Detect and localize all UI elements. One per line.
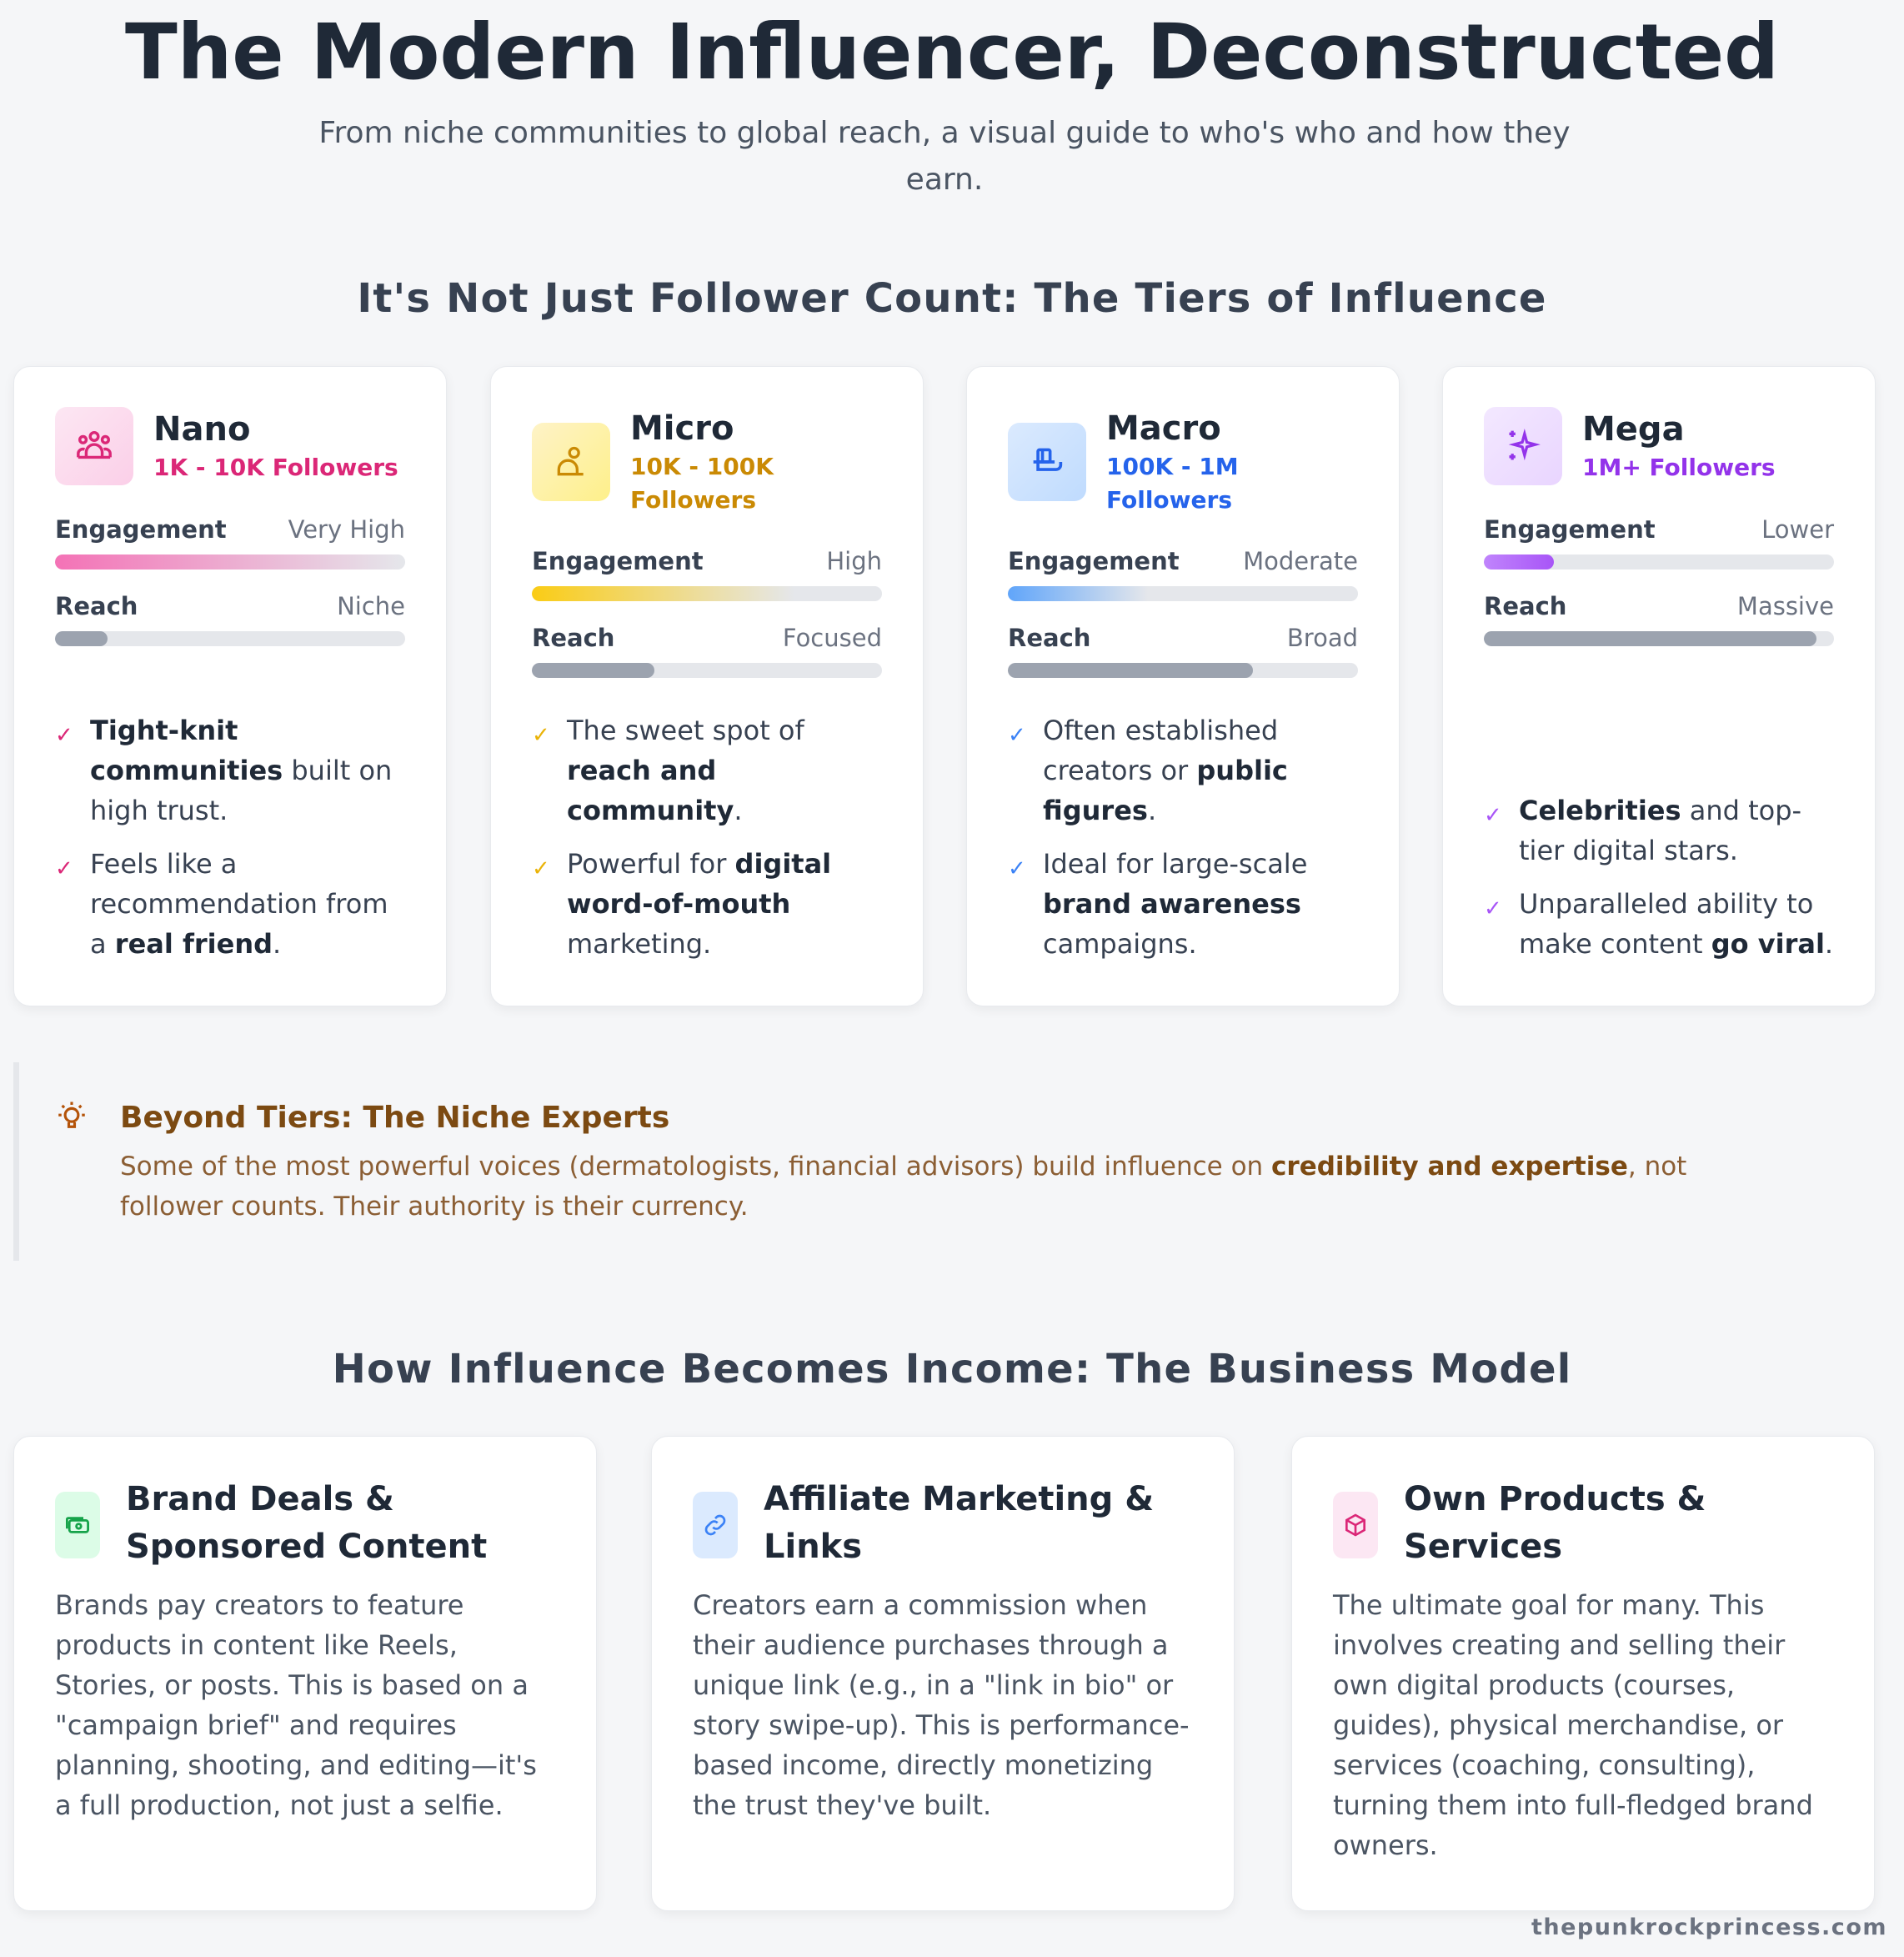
macro metrics: Moderate	[1243, 547, 1358, 575]
panel: affiliate	[651, 1436, 1235, 1911]
micro metrics: Reach	[532, 624, 614, 652]
affiliate title	[764, 1480, 1154, 1566]
own products title: Services	[1404, 1528, 1562, 1566]
mega bullets: ✓	[1484, 803, 1502, 828]
nano metrics	[55, 515, 405, 646]
affiliate title: Affiliate Marketing &	[764, 1480, 1154, 1518]
micro header: Followers	[630, 486, 756, 514]
mega metrics: Massive	[1737, 592, 1834, 620]
nano header: 1K - 10K Followers	[153, 454, 398, 481]
nano bullets: Tight-knit communities built on high trust.	[90, 715, 392, 826]
mega bullets: Celebrities and top-tier digital stars.	[1519, 795, 1801, 866]
micro header: Micro	[630, 409, 734, 448]
macro metrics: Engagement	[1008, 547, 1180, 575]
mega metrics: Reach	[1484, 592, 1566, 620]
macro bullets: ✓	[1008, 856, 1026, 881]
nano header: Nano	[153, 410, 250, 449]
subtitle: From niche communities to global reach, a visual guide to who's who and how they earn.	[318, 116, 1571, 197]
affiliate title: Links	[764, 1528, 862, 1566]
mega metrics	[1484, 515, 1834, 646]
micro bullets: ✓	[532, 723, 550, 748]
nano bullets	[55, 715, 392, 960]
icon: lightbulb	[58, 1102, 85, 1128]
micro metrics: High	[826, 547, 882, 575]
panel: nano	[13, 366, 447, 1006]
macro header: 100K - 1M	[1106, 453, 1239, 480]
macro bullets: Often established creators or public figures.	[1043, 715, 1288, 826]
macro metrics: Broad	[1287, 624, 1358, 652]
mega bullets: Unparalleled ability to make content go viral.	[1519, 888, 1833, 960]
micro header: 10K - 100K	[630, 453, 774, 480]
nano metrics: Reach	[55, 592, 138, 620]
micro metrics: Focused	[783, 624, 882, 652]
own products title	[1404, 1480, 1706, 1566]
mega bullets	[1484, 795, 1833, 960]
heading: business model: How Influence Becomes Income: The Business Model	[333, 1346, 1571, 1392]
mega header: 1M+ Followers	[1582, 454, 1776, 481]
icon: megaphone	[1008, 423, 1086, 501]
callout text: Some of the most powerful voices (dermatologists, financial advisors) build influence on credibility and expertise, not follower counts. Their authority is their currency.	[120, 1152, 1686, 1222]
macro metrics	[1008, 547, 1358, 678]
mega header	[1484, 407, 1776, 485]
nano metrics: Niche	[337, 592, 405, 620]
brand deals title	[126, 1480, 487, 1566]
macro header: Followers	[1106, 486, 1232, 514]
macro header: Macro	[1106, 409, 1221, 448]
panel: own products	[1291, 1436, 1875, 1911]
icon: community	[55, 407, 133, 485]
micro bullets: ✓	[532, 856, 550, 881]
panel: brand deals	[13, 1436, 597, 1911]
micro header	[532, 409, 774, 514]
micro bullets: Powerful for digital word-of-mouth marketing.	[567, 848, 831, 960]
macro metrics: Reach	[1008, 624, 1090, 652]
nano bullets: ✓	[55, 856, 73, 881]
mega metrics: Lower	[1761, 515, 1834, 544]
icon: box	[1333, 1492, 1378, 1558]
title: The Modern Influencer, Deconstructed	[125, 8, 1779, 97]
panel: micro	[490, 366, 924, 1006]
callout title: Beyond Tiers: The Niche Experts	[120, 1101, 669, 1135]
heading: tiers: It's Not Just Follower Count: The Tiers of Influence	[357, 275, 1547, 322]
macro bullets	[1008, 715, 1307, 960]
mega metrics: Engagement	[1484, 515, 1656, 544]
panel: mega	[1442, 366, 1876, 1006]
own products title: Own Products &	[1404, 1480, 1706, 1518]
micro metrics	[532, 547, 882, 678]
macro header	[1008, 409, 1239, 514]
brand deals title: Sponsored Content	[126, 1528, 487, 1566]
micro bullets: The sweet spot of reach and community.	[567, 715, 804, 826]
panel: macro	[966, 366, 1400, 1006]
nano header	[55, 407, 398, 485]
footer: thepunkrockprincess.com	[1531, 1914, 1887, 1940]
brand deals text: Brands pay creators to feature products in content like Reels, Stories, or posts. This is based on a "campaign brief" and requires planning, shooting, and editing—it's a full production, not just a selfie.	[55, 1589, 537, 1821]
brand deals title: Brand Deals &	[126, 1480, 394, 1518]
mega header: Mega	[1582, 410, 1685, 449]
nano metrics: Very High	[288, 515, 405, 544]
affiliate text: Creators earn a commission when their audience purchases through a unique link (e.g., in a "link in bio" or story swipe-up). This is performance-based income, directly monetizing the trust they've built.	[693, 1589, 1190, 1821]
macro bullets: Ideal for large-scale brand awareness campaigns.	[1043, 848, 1307, 960]
mega bullets: ✓	[1484, 896, 1502, 921]
icon: sparkles	[1484, 407, 1562, 485]
nano metrics: Engagement	[55, 515, 227, 544]
nano bullets: ✓	[55, 723, 73, 748]
micro bullets	[532, 715, 831, 960]
macro bullets: ✓	[1008, 723, 1026, 748]
icon: cash	[55, 1492, 100, 1558]
nano bullets: Feels like a recommendation from a real friend.	[90, 848, 388, 960]
callout: niche experts	[13, 1062, 1872, 1261]
micro metrics: Engagement	[532, 547, 704, 575]
own products text: The ultimate goal for many. This involves creating and selling their own digital products (courses, guides), physical merchandise, or services (coaching, consulting), turning them into full-fledged brand owners.	[1333, 1589, 1813, 1861]
icon: link	[693, 1492, 738, 1558]
icon: person	[532, 423, 610, 501]
